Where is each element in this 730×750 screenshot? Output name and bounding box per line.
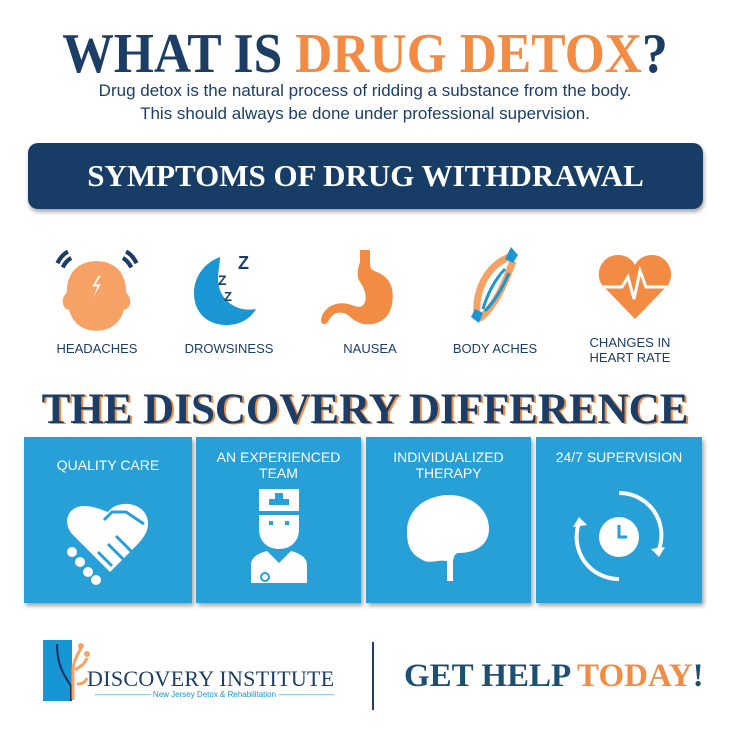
label: heart rate xyxy=(590,335,670,365)
icon: drowsiness: Z xyxy=(238,253,249,273)
icon: handshake heart xyxy=(67,504,148,585)
banner: symptoms heading xyxy=(28,143,703,209)
panel: experienced team: AN EXPERIENCED xyxy=(217,449,340,465)
icon: body aches xyxy=(471,247,518,323)
icon: headache xyxy=(56,250,138,331)
panel: quality care: QUALITY CARE xyxy=(57,457,159,473)
banner: symptoms heading: SYMPTOMS OF DRUG WITHDRAWAL xyxy=(87,158,644,193)
icon: brain xyxy=(407,495,489,581)
icon: drowsiness: Z xyxy=(224,289,232,304)
panel: 24/7 supervision: 24/7 SUPERVISION xyxy=(556,449,682,465)
panel: experienced team: TEAM xyxy=(259,465,298,481)
call to action: GET HELP TODAY! xyxy=(404,658,704,694)
icon: heart rate xyxy=(598,255,672,319)
icon: doctor xyxy=(251,489,307,583)
panel: individualized therapy: THERAPY xyxy=(415,465,482,481)
panel: individualized therapy xyxy=(366,437,531,603)
label: drowsiness: DROWSINESS xyxy=(185,341,273,356)
text: institute name: DISCOVERY INSTITUTE xyxy=(87,666,334,691)
label: body aches: BODY ACHES xyxy=(453,341,537,356)
title: WHAT IS DRUG DETOX? xyxy=(62,23,668,85)
icon: drowsiness: Z xyxy=(218,272,227,288)
text: tagline: ——————— New Jersey Detox & Rehabilitation ——————— xyxy=(95,690,334,699)
logo xyxy=(43,640,334,701)
label: heart rate: HEART RATE xyxy=(590,350,670,365)
icon: clock cycle xyxy=(573,491,665,581)
icon: logo tree xyxy=(43,640,90,701)
label: headaches: HEADACHES xyxy=(57,341,137,356)
heading: discovery difference: THE DISCOVERY DIFFERENCE xyxy=(42,386,688,433)
subtitle xyxy=(99,81,631,123)
panel: 24/7 supervision xyxy=(536,437,702,603)
label: heart rate: CHANGES IN xyxy=(590,335,670,350)
panel: individualized therapy: INDIVIDUALIZED xyxy=(393,449,504,465)
panel: quality care xyxy=(24,437,192,603)
subtitle: This should always be done under professional supervision. xyxy=(140,104,590,123)
icon: stomach xyxy=(321,250,393,324)
subtitle: Drug detox is the natural process of ridding a substance from the body. xyxy=(99,81,631,100)
icon: drowsiness xyxy=(194,253,256,325)
panel: experienced team xyxy=(196,437,361,603)
label: nausea: NAUSEA xyxy=(343,341,397,356)
